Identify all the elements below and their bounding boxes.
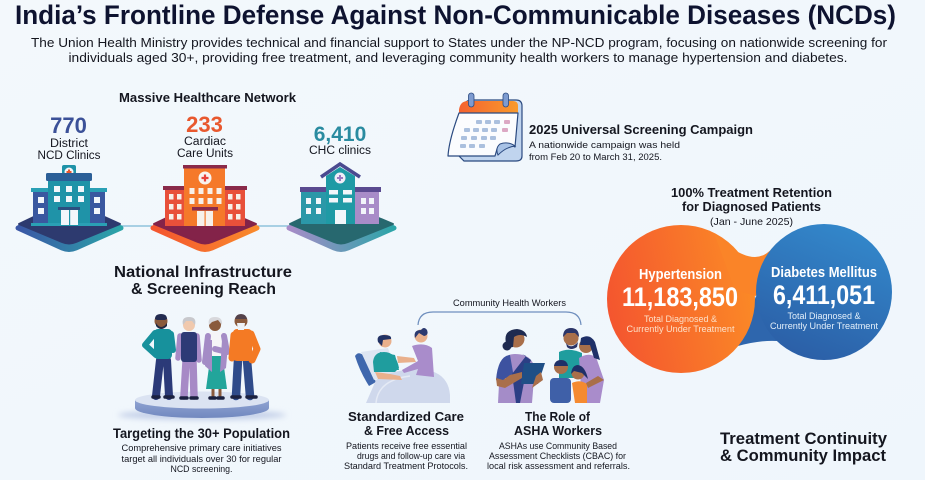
panel: ASHA workers	[487, 328, 630, 471]
description: Standard Treatment Protocols.	[344, 461, 468, 471]
heading: The Role of	[525, 409, 591, 424]
icon: district hospital	[18, 165, 121, 250]
intro text: The Union Health Ministry provides technical and financial support to States under the NP-NCD program, focusing on nationwide screening for	[31, 35, 888, 50]
diabetes blob: Diabetes Mellitus	[771, 265, 877, 281]
description: NCD screening.	[170, 464, 232, 475]
icon: CHC hospital	[289, 164, 394, 250]
description	[122, 443, 282, 475]
heading: treatment retention: for Diagnosed Patients	[682, 199, 821, 214]
heading	[514, 409, 602, 438]
network heading: Massive Healthcare Network	[119, 91, 296, 105]
description: ASHAs use Community Based	[499, 441, 617, 451]
intro text	[31, 35, 888, 65]
heading: national infrastructure	[114, 264, 292, 298]
description	[344, 441, 468, 471]
hypertension blob: 11,183,850	[622, 282, 738, 312]
heading: treatment continuity: & Community Impact	[720, 447, 886, 465]
panel: healthcare network	[18, 91, 394, 250]
stat: district NCD clinics: District	[50, 138, 89, 150]
diabetes blob: 6,411,051	[773, 280, 875, 310]
hypertension caption	[626, 314, 735, 334]
diabetes blob	[756, 224, 892, 360]
icon: cardiac hospital	[153, 165, 257, 250]
description: A nationwide campaign was held	[529, 140, 680, 151]
description: Assessment Checklists (CBAC) for	[489, 451, 626, 461]
heading: national infrastructure: National Infrastructure	[114, 264, 292, 281]
description: Comprehensive primary care initiatives	[122, 443, 282, 454]
description: local risk assessment and referrals.	[487, 461, 630, 471]
stat: cardiac care units: 233	[186, 112, 223, 137]
intro text: individuals aged 30+, providing free treatment, and leveraging community health workers to manage hypertension and diabetes.	[68, 50, 848, 65]
description: Patients receive free essential	[346, 441, 467, 451]
hypertension caption: Total Diagnosed &	[644, 314, 717, 324]
heading: ASHA Workers	[514, 423, 602, 438]
stat: district NCD clinics: 770	[50, 113, 87, 138]
heading: Targeting the 30+ Population	[113, 426, 290, 441]
hypertension blob	[607, 225, 775, 373]
heading: treatment continuity	[720, 430, 888, 465]
description	[487, 441, 630, 471]
stat: CHC clinics	[309, 123, 371, 157]
stat: CHC clinics: 6,410	[314, 123, 366, 146]
heading: 2025 Universal Screening Campaign	[529, 123, 753, 137]
stat: district NCD clinics	[38, 113, 101, 162]
heading: treatment retention: 100% Treatment Retention	[671, 185, 832, 200]
chart: treatment blobs	[607, 224, 892, 373]
stat: district NCD clinics: NCD Clinics	[38, 150, 101, 162]
label and bracket: community health workers: Community Health Workers	[453, 298, 566, 309]
description	[529, 140, 680, 163]
panel: targeting the 30+ population	[113, 314, 290, 475]
stat: CHC clinics: CHC clinics	[309, 145, 371, 157]
icon: calendar	[448, 93, 522, 161]
icon: platform with four adults	[118, 314, 286, 420]
icon: nurse caring for patient in bed	[355, 328, 450, 403]
diabetes caption	[770, 311, 879, 331]
icon: ASHA worker with family	[496, 328, 604, 403]
heading: treatment retention: (Jan - June 2025)	[710, 216, 793, 228]
connector lines	[120, 225, 290, 227]
description: drugs and follow-up care via	[357, 451, 465, 461]
heading: Standardized Care	[348, 409, 464, 424]
heading: national infrastructure: & Screening Reach	[131, 281, 276, 298]
description: target all individuals over 30 for regular	[122, 454, 282, 465]
hypertension blob: Hypertension	[639, 266, 722, 283]
title: India’s Frontline Defense Against Non-Communicable Diseases (NCDs)	[15, 0, 896, 30]
stat: cardiac care units	[177, 112, 233, 160]
older man in orange	[232, 314, 257, 397]
lower neck joining the blobs	[738, 296, 777, 346]
stat: cardiac care units: Cardiac	[184, 136, 226, 148]
label and bracket: community health workers	[418, 298, 581, 325]
man in teal	[145, 314, 173, 397]
panel: standardized care	[344, 328, 468, 471]
description: from Feb 20 to March 31, 2025.	[529, 152, 662, 163]
stat: cardiac care units: Care Units	[177, 148, 233, 160]
heading	[348, 409, 464, 438]
woman in lavender with vest	[178, 317, 199, 398]
woman in teal skirt	[205, 317, 228, 398]
heading: & Free Access	[364, 423, 449, 438]
diabetes caption: Currently Under Treatment	[770, 321, 879, 331]
panel: screening campaign	[448, 93, 753, 163]
diabetes caption: Total Diagnosed &	[788, 311, 860, 321]
hypertension caption: Currently Under Treatment	[626, 324, 735, 334]
heading: treatment continuity: Treatment Continuity	[720, 430, 888, 448]
heading: treatment retention	[671, 185, 832, 228]
